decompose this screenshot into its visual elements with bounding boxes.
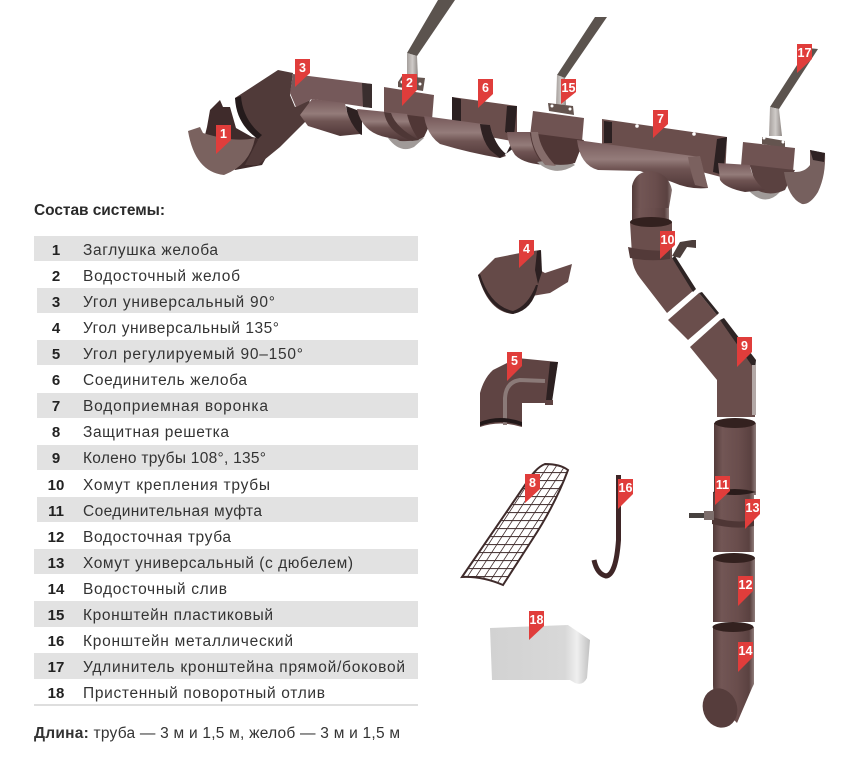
row 2: Водосточный желоб [83,268,240,285]
row 11: 11 [48,503,64,520]
row 13: Хомут универсальный (с дюбелем) [83,555,353,572]
marker 1: 1 [220,127,227,141]
marker 17 [797,44,812,73]
row 10: 10 [48,477,64,494]
row 8: Защитная решетка [83,424,229,441]
marker 13 [745,499,760,529]
marker 17: 17 [798,46,811,60]
end cap [188,127,255,175]
row 5: 5 [52,346,60,363]
row 15: 15 [48,607,64,624]
marker 8: 8 [529,476,536,490]
part 8: protective mesh [462,464,568,585]
outlet stem [632,208,669,222]
marker 7: 7 [657,112,664,126]
row 1: 1 [52,242,60,259]
drain outlet 14 [697,622,754,733]
row 3: Угол универсальный 90° [83,294,275,311]
row 5: Угол регулируемый 90–150° [83,346,303,363]
row 7 [37,393,418,418]
gutter segment [424,116,506,158]
row 9 [37,445,418,470]
marker 14 [738,642,753,672]
row 1 [34,236,418,261]
row 18: Пристенный поворотный отлив [83,685,325,702]
marker 4 [519,240,534,268]
marker 12: 12 [739,578,752,592]
strap: bracket 2 [407,0,455,78]
marker 1 [216,125,231,154]
funnel back 7 [602,119,727,178]
part 4: corner 135 [478,250,572,314]
marker 6 [478,79,493,108]
row 7: Водоприемная воронка [83,398,268,415]
row 3: 3 [52,294,60,311]
row 9: Колено трубы 108°, 135° [83,450,266,467]
marker 12 [738,576,753,606]
marker 5 [507,352,522,381]
marker 3: 3 [299,61,306,75]
elbow 9 [690,318,756,417]
marker 14: 14 [739,644,752,658]
end cap back part [205,100,275,170]
coupler with clamp 10 [628,217,696,313]
bracket 2 [383,76,434,149]
marker 10 [660,231,675,259]
row 13 [34,549,418,574]
marker 11 [715,476,730,505]
connector 6 [452,97,517,142]
row 14: Водосточный слив [83,581,227,598]
strap: bracket 15 [556,17,607,105]
funnel front [577,140,708,188]
length note: Длина: труба — 3 м и 1,5 м, желоб — 3 м и 1,5 м [34,725,400,742]
coupling 11 and clamp 13 [689,489,756,552]
marker 15 [561,79,576,104]
row 4: 4 [52,320,61,337]
marker 7 [653,110,668,138]
row 6: Соединитель желоба [83,372,247,389]
title: Состав системы: [34,202,165,219]
marker 6: 6 [482,81,489,95]
corner 90 [235,70,372,165]
marker 11: 11 [716,478,729,492]
marker 4: 4 [523,242,530,256]
bracket 17 and right gutter [718,136,825,204]
marker 8 [525,474,540,503]
marker 18 [529,611,544,640]
row 12: Водосточная труба [83,529,231,546]
row 17: Удлинитель кронштейна прямой/боковой [83,659,405,676]
marker 2 [402,74,417,106]
row 3 [37,288,418,313]
row 15: Кронштейн пластиковый [83,607,273,624]
downpipe [628,208,756,733]
marker 10: 10 [661,233,674,247]
row 17: 17 [48,659,64,676]
row 11: Соединительная муфта [83,503,262,520]
row 10: Хомут крепления трубы [83,477,270,494]
row 18: 18 [48,685,64,702]
marker 5: 5 [511,354,518,368]
gutter segment [357,109,419,140]
row 12: 12 [48,529,64,546]
row 16: Кронштейн металлический [83,633,293,650]
marker 16 [618,479,633,509]
marker 13: 13 [746,501,759,515]
table: system components [34,236,418,702]
marker 2: 2 [406,76,413,90]
marker 15: 15 [562,81,575,95]
part 16: metal bracket [594,475,618,576]
bracket 15 [530,103,584,171]
row 13: 13 [48,555,64,572]
row 11 [37,497,418,522]
pipe section [668,293,717,340]
marker 16: 16 [619,481,632,495]
pipe 12 upper [714,418,756,495]
row 8: 8 [52,424,60,441]
strap: extension 17 [769,48,818,136]
row 1: Заглушка желоба [83,242,218,259]
row 5 [37,340,418,365]
part 5: adjustable corner [480,358,558,427]
part 18: wall outlet [490,625,590,684]
row 15 [34,601,418,627]
row 7: 7 [52,398,60,415]
row 6: 6 [52,372,60,389]
row 14: 14 [48,581,65,598]
marker 9: 9 [741,339,748,353]
row 17 [34,653,418,679]
gutter assembly [188,0,825,733]
row 16: 16 [48,633,64,650]
row 4: Угол универсальный 135° [83,320,279,337]
pipe 12 lower [713,553,755,622]
T outlet [632,171,672,213]
marker 18: 18 [530,613,543,627]
marker 9 [737,337,752,367]
row 9: 9 [52,450,60,467]
row 2: 2 [52,268,60,285]
marker 3 [295,59,310,87]
